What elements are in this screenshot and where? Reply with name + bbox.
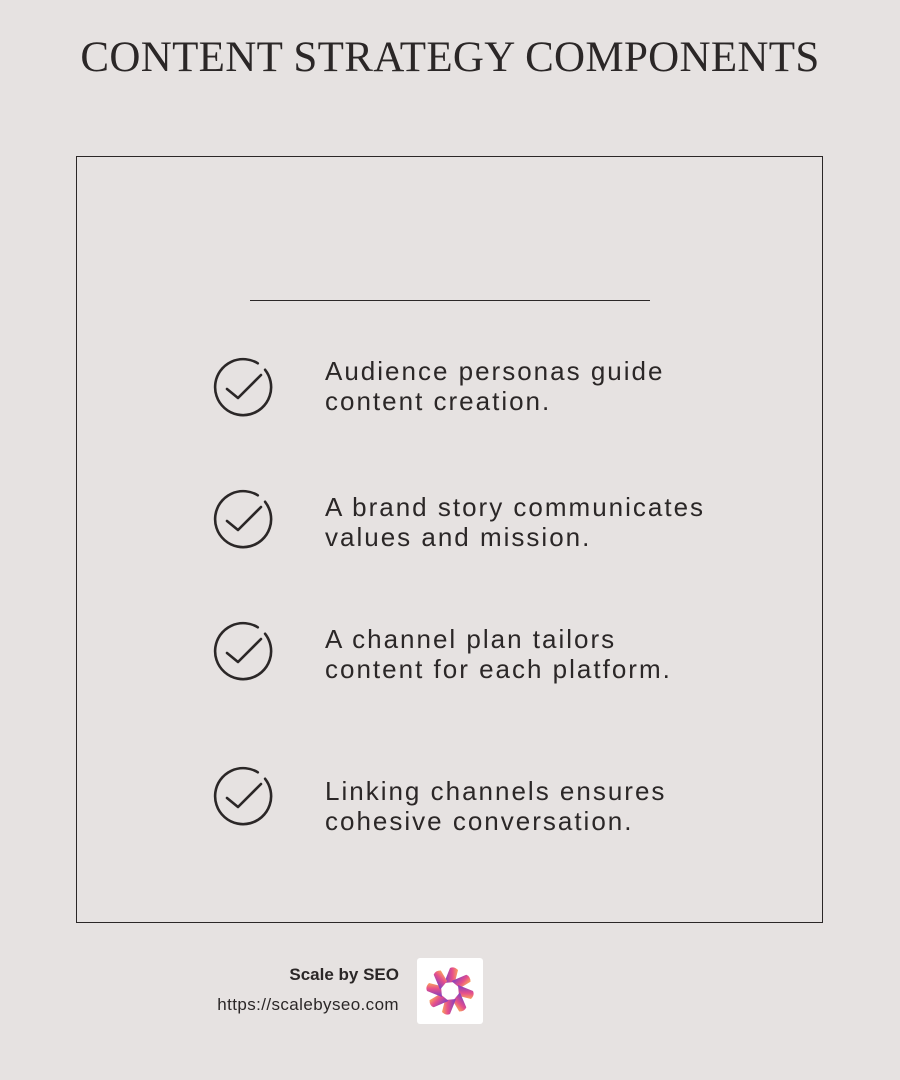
text: content creation. — [325, 386, 551, 416]
text: values and mission. — [325, 522, 591, 552]
item 4 — [214, 766, 666, 836]
title: CONTENT STRATEGY COMPONENTS — [80, 34, 820, 81]
item 1 — [214, 356, 664, 416]
text — [325, 624, 672, 684]
brand name: Scale by SEO — [289, 965, 399, 984]
text — [325, 492, 705, 552]
icon: check circle — [214, 622, 272, 680]
text: A channel plan tailors — [325, 624, 616, 654]
divider line — [250, 300, 650, 301]
text: Audience personas guide — [325, 356, 664, 386]
item 2 — [214, 490, 705, 552]
text — [325, 776, 666, 836]
item 3 — [214, 622, 672, 684]
panel: components box — [76, 156, 823, 923]
icon: logo — [417, 958, 483, 1024]
text: A brand story communicates — [325, 492, 705, 522]
text: cohesive conversation. — [325, 806, 633, 836]
text: content for each platform. — [325, 654, 672, 684]
icon: check circle — [214, 490, 272, 548]
icon: check circle — [214, 358, 272, 416]
text: Linking channels ensures — [325, 776, 666, 806]
brand url: https://scalebyseo.com — [217, 995, 399, 1014]
icon: check circle — [214, 766, 272, 826]
text — [325, 356, 664, 416]
